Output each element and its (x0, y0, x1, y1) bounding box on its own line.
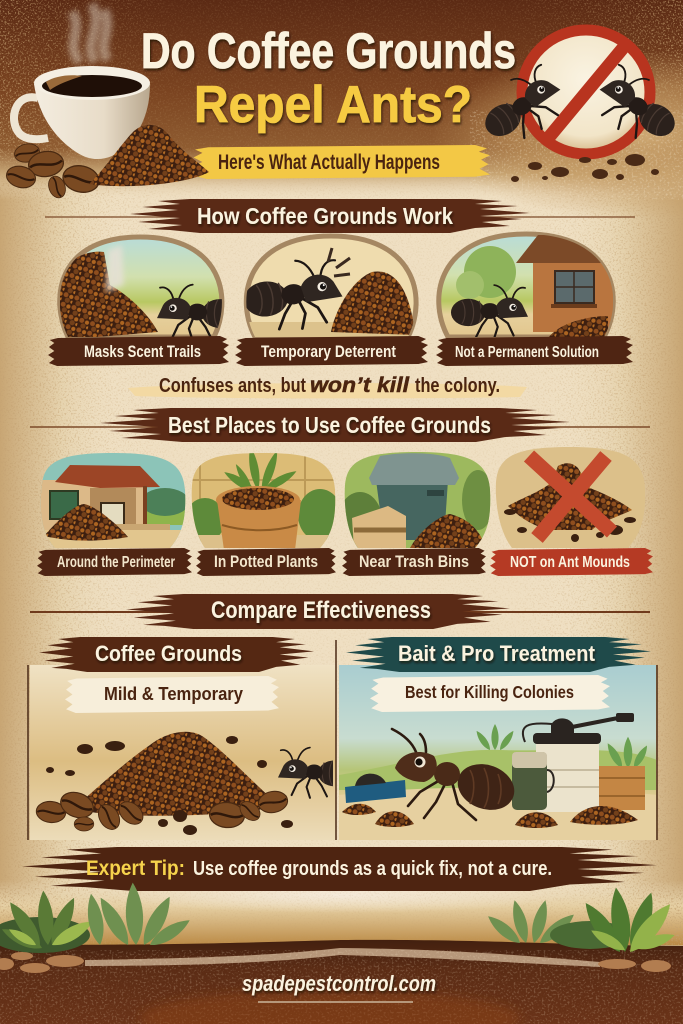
divider (335, 640, 337, 840)
subtitle ribbon (192, 145, 490, 179)
left plants (0, 882, 193, 953)
panel: temporary deterrent (235, 236, 428, 366)
caption: confuses ants (128, 374, 527, 398)
panel: coffee grounds comparison (28, 637, 351, 840)
tile: not on ant mounds (490, 447, 653, 576)
treatment scene (339, 713, 657, 840)
hero: no-ants sign (471, 30, 683, 154)
soil heaps (342, 804, 638, 828)
label: Around the Perimeter (57, 554, 175, 571)
label: NOT on Ant Mounds (510, 554, 630, 571)
footer website: spadepestcontrol.com (242, 971, 436, 996)
label (342, 548, 486, 576)
tile: around the perimeter (37, 453, 192, 576)
right ant (587, 61, 683, 154)
heading (346, 637, 651, 672)
caption: confuses ants: won’t kill (310, 374, 410, 397)
rocks (0, 952, 671, 973)
label (235, 336, 428, 366)
title: Repel Ants? (194, 76, 472, 134)
heading: Bait & Pro Treatment (398, 641, 596, 666)
label (48, 336, 229, 366)
sub label: Best for Killing Colonies (405, 682, 574, 702)
panel: bait and pro treatment comparison (339, 637, 657, 840)
panel: masks scent trails (48, 237, 238, 366)
label: Not a Permanent Solution (455, 344, 599, 361)
sub label (370, 675, 610, 712)
sub label: Mild & Temporary (104, 683, 244, 704)
label (196, 548, 336, 576)
expert tip banner: Expert Tip: (86, 857, 185, 880)
title (141, 23, 516, 134)
hero: coffee beans (4, 142, 102, 200)
label: In Potted Plants (214, 552, 318, 571)
jar (512, 752, 554, 810)
label (490, 548, 653, 576)
label (436, 336, 633, 366)
tile: near trash bins (338, 452, 494, 576)
bait station (345, 774, 406, 803)
heading (39, 637, 314, 672)
panel: not a permanent solution (436, 234, 633, 366)
hero: coffee cup with steam (14, 4, 150, 159)
hero: coffee grounds pile (89, 125, 209, 186)
subtitle ribbon: Here's What Actually Happens (218, 151, 440, 174)
section heading: compare effectiveness (30, 594, 650, 629)
red x (529, 456, 612, 538)
title: Do Coffee Grounds (141, 23, 516, 79)
ant (278, 746, 333, 799)
right plants (484, 886, 677, 957)
caption: confuses ants: the colony. (415, 375, 500, 397)
label: Masks Scent Trails (84, 342, 201, 361)
tile: in potted plants (192, 453, 336, 576)
caption: confuses ants: Confuses ants, but (159, 375, 306, 397)
wooden box (599, 766, 645, 810)
label: Temporary Deterrent (261, 342, 396, 361)
brown ant (392, 729, 521, 820)
label (37, 548, 192, 576)
sprayer (523, 713, 634, 812)
hero: scattered soil (511, 154, 659, 182)
ground band (0, 940, 683, 1024)
section heading: best places: Best Places to Use Coffee Grounds (168, 412, 491, 438)
label: Near Trash Bins (359, 552, 469, 571)
sub label (65, 676, 279, 713)
expert tip banner: Use coffee grounds as a quick fix, not a cure. (193, 858, 552, 880)
section heading: how coffee grounds work: How Coffee Grounds Work (197, 203, 453, 229)
left ant (471, 61, 573, 154)
coffee pile (35, 732, 351, 835)
heading: Coffee Grounds (95, 641, 242, 666)
section heading: best places (30, 408, 650, 442)
section heading: how coffee grounds work (45, 199, 635, 233)
section heading: compare effectiveness: Compare Effectiveness (211, 597, 431, 624)
expert tip banner (22, 847, 657, 891)
